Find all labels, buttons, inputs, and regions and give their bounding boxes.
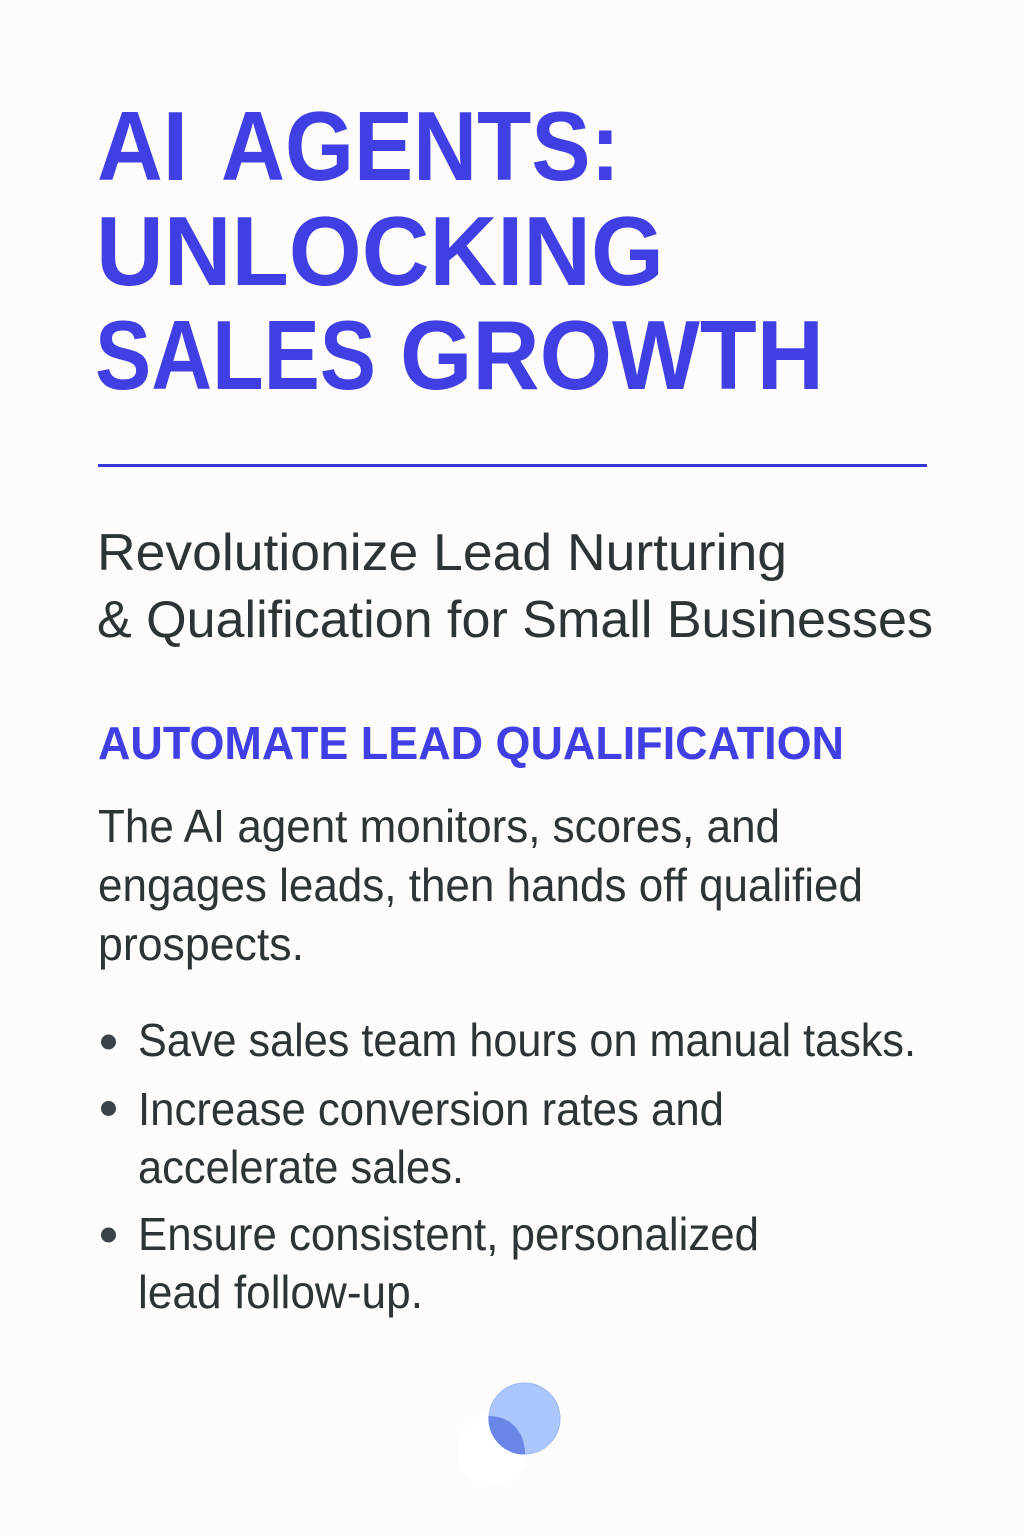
title: AGENTS: — [221, 91, 620, 201]
body paragraph: prospects. — [98, 918, 304, 970]
bullet: follow-up: lead follow-up. — [138, 1266, 423, 1318]
bullet: conversion rates — [101, 1083, 724, 1193]
title: UNLOCKING — [96, 196, 664, 306]
bullet: conversion rates: accelerate sales. — [138, 1141, 464, 1193]
title: AI — [97, 91, 188, 201]
bullet: follow-up — [101, 1208, 759, 1318]
section heading: AUTOMATE LEAD QUALIFICATION — [98, 717, 844, 769]
title: SALES — [95, 300, 376, 410]
body paragraph — [98, 800, 863, 970]
title: GROWTH — [400, 300, 824, 410]
subtitle — [97, 524, 933, 649]
bullet list — [101, 1014, 916, 1318]
bullet: conversion rates: Increase conversion rates and — [138, 1083, 724, 1135]
icon: overlapping circles — [457, 1383, 560, 1485]
title — [95, 91, 824, 410]
body paragraph: The AI agent monitors, scores, and — [98, 800, 780, 852]
bullet: save hours: Save sales team hours on manual tasks. — [138, 1014, 916, 1066]
bullet: follow-up: Ensure consistent, personalized — [138, 1208, 759, 1260]
subtitle: Revolutionize Lead Nurturing — [97, 524, 787, 582]
body paragraph: engages leads, then hands off qualified — [98, 859, 863, 911]
subtitle: & Qualification for Small Businesses — [97, 591, 933, 649]
